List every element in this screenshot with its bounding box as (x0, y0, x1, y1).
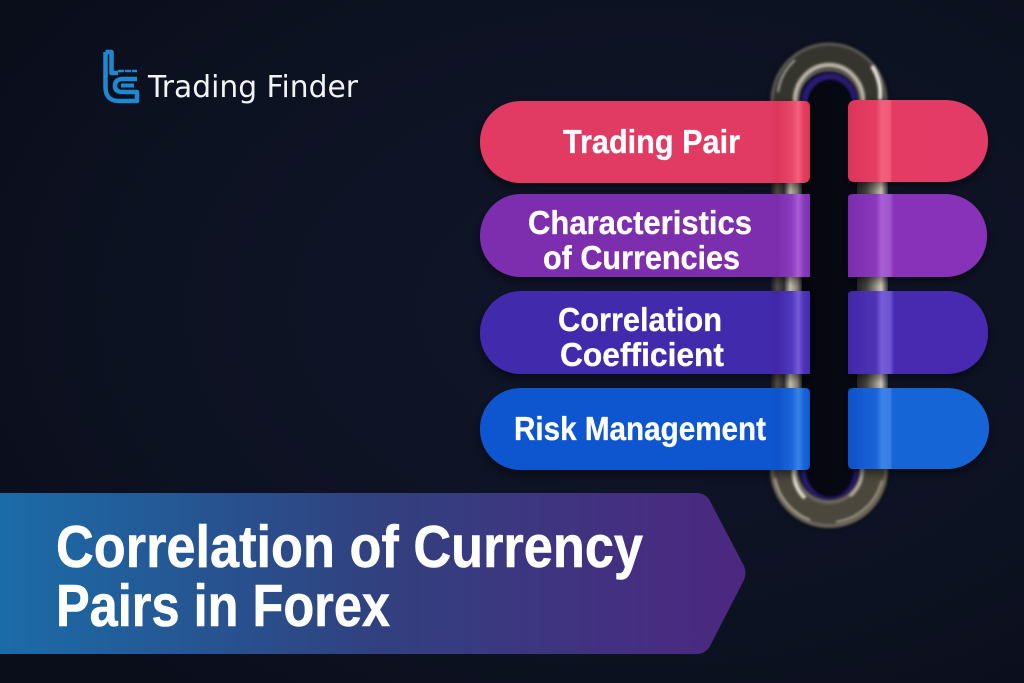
ribbon: Characteristics of Currencies (480, 194, 987, 277)
label: Trading Pair: Trading Pair (563, 123, 740, 160)
ribbon: Trading Pair (480, 100, 988, 183)
label: Correlation Coefficient: Correlation (558, 301, 722, 338)
icon: logo mark (106, 52, 137, 101)
wordmark: Trading Finder (147, 70, 359, 105)
vertical rods (771, 104, 802, 466)
bottom bend (784, 466, 874, 514)
title banner (0, 493, 746, 654)
label: Correlation Coefficient: Coefficient (560, 336, 724, 373)
title: Correlation of Currency (56, 514, 643, 580)
chain link (771, 57, 888, 522)
link interior (799, 72, 859, 499)
top bend (785, 57, 873, 105)
ribbon: Risk Management (480, 388, 989, 470)
label: Characteristics of Currencies: of Currencies (543, 239, 740, 276)
label: Characteristics of Currencies: Characteristics (528, 204, 752, 241)
logo: Trading Finder (106, 52, 359, 105)
label: Risk Management: Risk Management (514, 410, 766, 447)
title: Pairs in Forex (56, 573, 390, 639)
ribbon: Correlation Coefficient (480, 291, 988, 374)
